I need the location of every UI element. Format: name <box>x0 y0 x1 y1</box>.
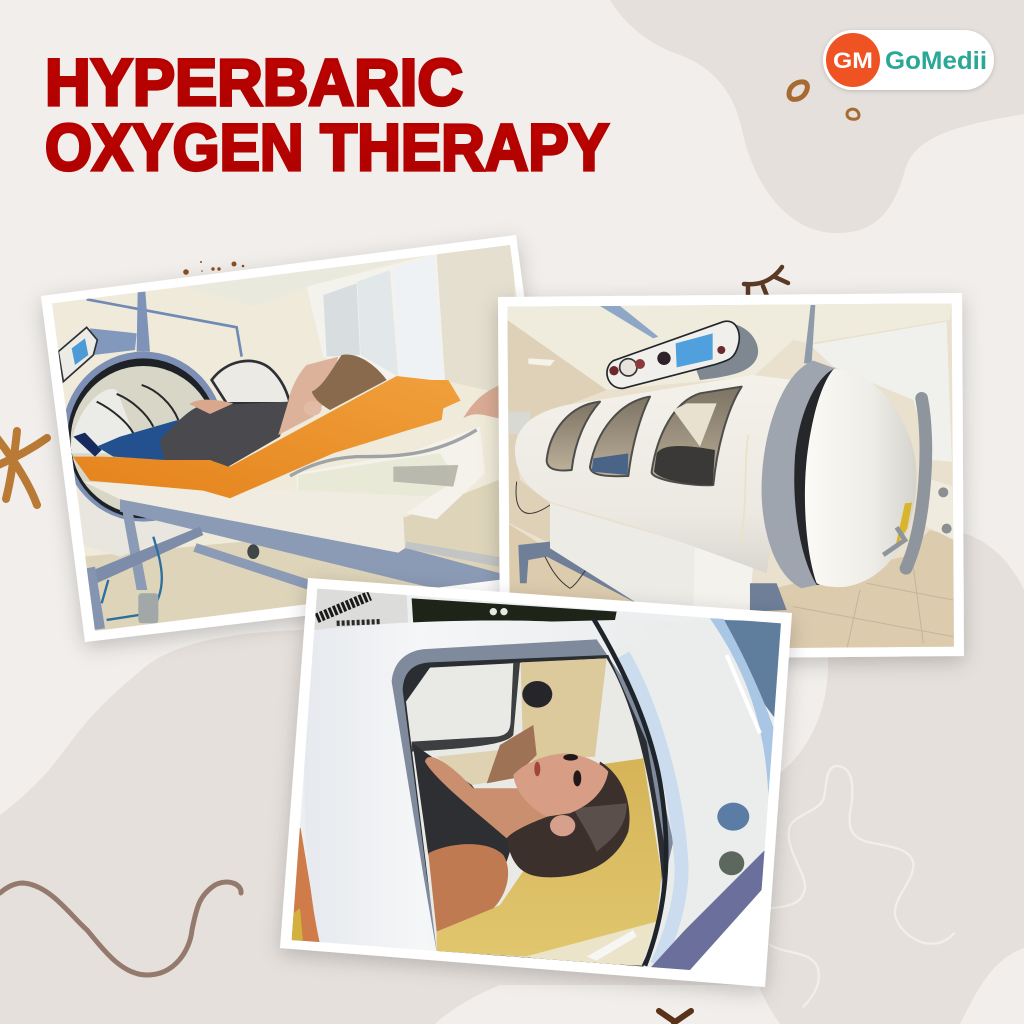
background blob: lower <box>0 530 1024 1024</box>
base frame <box>518 542 635 602</box>
cable <box>739 435 748 547</box>
equipment strip <box>313 588 408 630</box>
yellow label <box>896 502 912 544</box>
orange pad <box>73 376 461 498</box>
icon: brown cross doodle <box>659 1011 691 1024</box>
control panel face <box>607 321 739 388</box>
squiggle: brown line bottom left <box>0 882 241 975</box>
door behind <box>212 361 290 403</box>
yellow mat <box>437 758 662 957</box>
bottom cream <box>525 922 657 966</box>
table frame <box>120 498 507 588</box>
silver tube <box>405 542 500 567</box>
man: jeans <box>97 419 180 460</box>
title line 1: HYPERBARIC <box>45 45 463 119</box>
chamber window 2 <box>590 397 650 476</box>
strap <box>487 725 537 783</box>
woman: arm <box>428 844 508 932</box>
bed top <box>83 482 430 553</box>
photo 2 image <box>508 304 954 648</box>
man: hand <box>189 400 233 414</box>
dome <box>805 369 916 587</box>
inside dark window frame <box>412 662 520 752</box>
photo 3 image <box>292 588 781 970</box>
window black strip <box>403 655 667 967</box>
purple bar <box>650 850 765 972</box>
icon: brown ring large <box>789 82 807 99</box>
background blob: light patch right of photo <box>760 650 828 790</box>
man: ear <box>304 401 322 416</box>
photo 1 image <box>52 245 517 631</box>
grey ring <box>762 361 835 588</box>
logo mark: GM <box>833 48 873 73</box>
tray <box>297 427 485 519</box>
woman: chest skin <box>425 757 557 838</box>
panel: photo 2 closed hyperbaric chamber <box>498 290 970 660</box>
man: hair <box>312 355 387 410</box>
woman: eyes and lips <box>534 754 581 786</box>
interior <box>406 658 662 966</box>
logo wordmark: GoMedii <box>885 47 987 75</box>
photo 1 white frame <box>41 235 563 642</box>
handle <box>587 930 637 961</box>
photo 2 white frame <box>498 293 964 660</box>
chamber ring <box>62 352 225 522</box>
assistant hand <box>463 385 500 418</box>
chamber base <box>84 544 130 556</box>
cabinet <box>437 750 500 785</box>
squiggle: white lines bottom right <box>770 766 954 1007</box>
woman: black top <box>413 743 513 862</box>
icon: brown ring small <box>847 109 859 119</box>
control panel screen <box>676 333 713 367</box>
chamber white shell <box>304 620 770 972</box>
title line 2: OXYGEN THERAPY <box>45 110 609 184</box>
background blob: top right <box>610 0 1024 233</box>
cabinet <box>550 503 753 612</box>
right table <box>926 480 953 540</box>
pole <box>804 305 815 363</box>
icon: speck dots <box>183 261 244 275</box>
control panel <box>90 328 137 355</box>
left orange strip <box>280 815 320 945</box>
title <box>45 45 609 184</box>
icon: starfish doodle <box>0 431 47 505</box>
woman: hair back <box>507 762 630 877</box>
chamber window 1 <box>547 402 600 471</box>
woman: ear <box>550 815 575 836</box>
control panel housing <box>696 324 758 380</box>
photo 3 white frame <box>280 578 792 987</box>
man: neck and face <box>278 357 338 435</box>
icon: eyelash doodle <box>744 267 788 296</box>
inside beige panel <box>521 658 607 762</box>
logo <box>823 30 994 90</box>
wheel handle <box>883 527 905 555</box>
coiled cable <box>522 681 552 708</box>
window grey frame <box>392 639 673 968</box>
chamber window 3 <box>652 387 742 485</box>
man: shoe <box>73 433 102 457</box>
logo mark <box>826 33 880 87</box>
panel: photo 3 woman inside chamber <box>280 575 800 990</box>
corner wall <box>723 620 783 725</box>
knob: metal <box>719 851 744 875</box>
chamber ring <box>613 618 769 972</box>
man: sweater <box>160 402 288 467</box>
knob: blue <box>717 803 749 831</box>
woman: face <box>513 753 608 817</box>
black gasket <box>793 367 835 585</box>
logo pill <box>823 30 994 90</box>
chamber body <box>515 375 793 573</box>
panel: photo 1 reclining man on chamber bed <box>40 235 563 642</box>
